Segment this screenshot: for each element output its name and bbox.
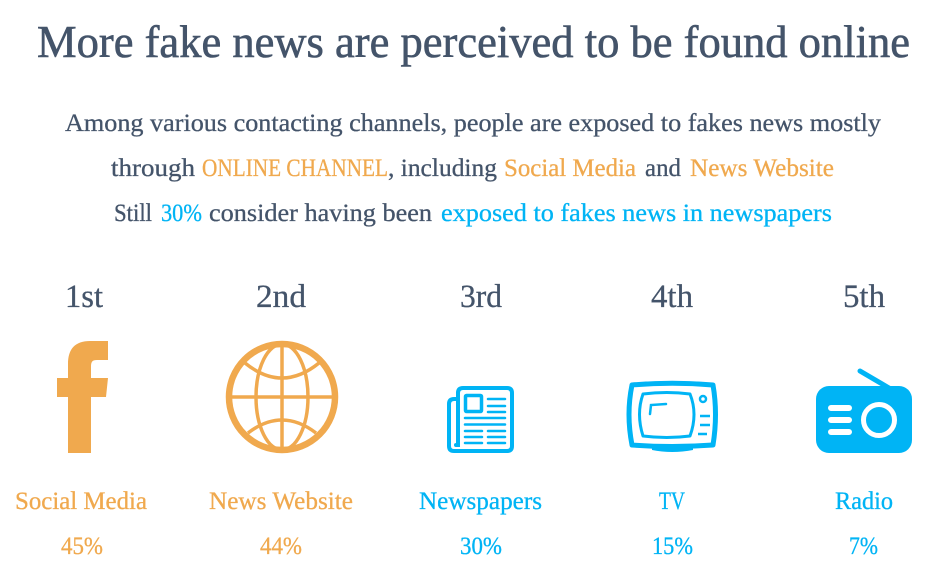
intro text block: exposed to fakes news in newspapers <box>441 200 832 227</box>
column: News Website <box>209 279 353 560</box>
label: Newspapers <box>419 488 542 515</box>
intro text block: News Website <box>690 155 834 182</box>
icon: globe <box>229 344 335 450</box>
rank heading 1st: 1st <box>65 279 103 315</box>
value: 15% <box>652 533 693 560</box>
column: TV <box>629 279 716 560</box>
label: TV <box>659 488 685 515</box>
intro text block: consider having been <box>209 200 433 227</box>
label: News Website <box>209 488 353 515</box>
value: 44% <box>260 533 302 560</box>
intro text block <box>65 110 882 227</box>
rank heading 4th: 4th <box>651 279 693 315</box>
rank heading 3rd: 3rd <box>460 279 502 315</box>
intro text block: , including <box>388 155 498 182</box>
icon: newspaper <box>449 388 512 451</box>
icon: television <box>629 383 716 446</box>
value: 45% <box>61 533 103 560</box>
icon: facebook f <box>57 341 108 453</box>
value: 7% <box>849 533 878 560</box>
icon: radio <box>816 371 912 453</box>
column: Radio <box>816 279 912 560</box>
rank heading 2nd: 2nd <box>256 279 307 315</box>
intro text block: Still <box>114 200 152 227</box>
intro text block: ONLINE CHANNEL <box>202 155 388 182</box>
column: Social Media <box>15 279 147 560</box>
value: 30% <box>460 533 502 560</box>
label: Social Media <box>15 488 147 515</box>
intro text block: Social Media <box>504 155 636 182</box>
rank heading 5th: 5th <box>843 279 885 315</box>
intro text block: through <box>111 155 196 182</box>
intro text block: Among various contacting channels, people are exposed to fakes news mostly <box>65 110 882 137</box>
column: Newspapers <box>419 279 542 560</box>
intro text block: and <box>645 155 681 182</box>
label: Radio <box>835 488 893 515</box>
title: More fake news are perceived to be found online <box>37 16 910 67</box>
intro text block: 30% <box>161 200 202 227</box>
